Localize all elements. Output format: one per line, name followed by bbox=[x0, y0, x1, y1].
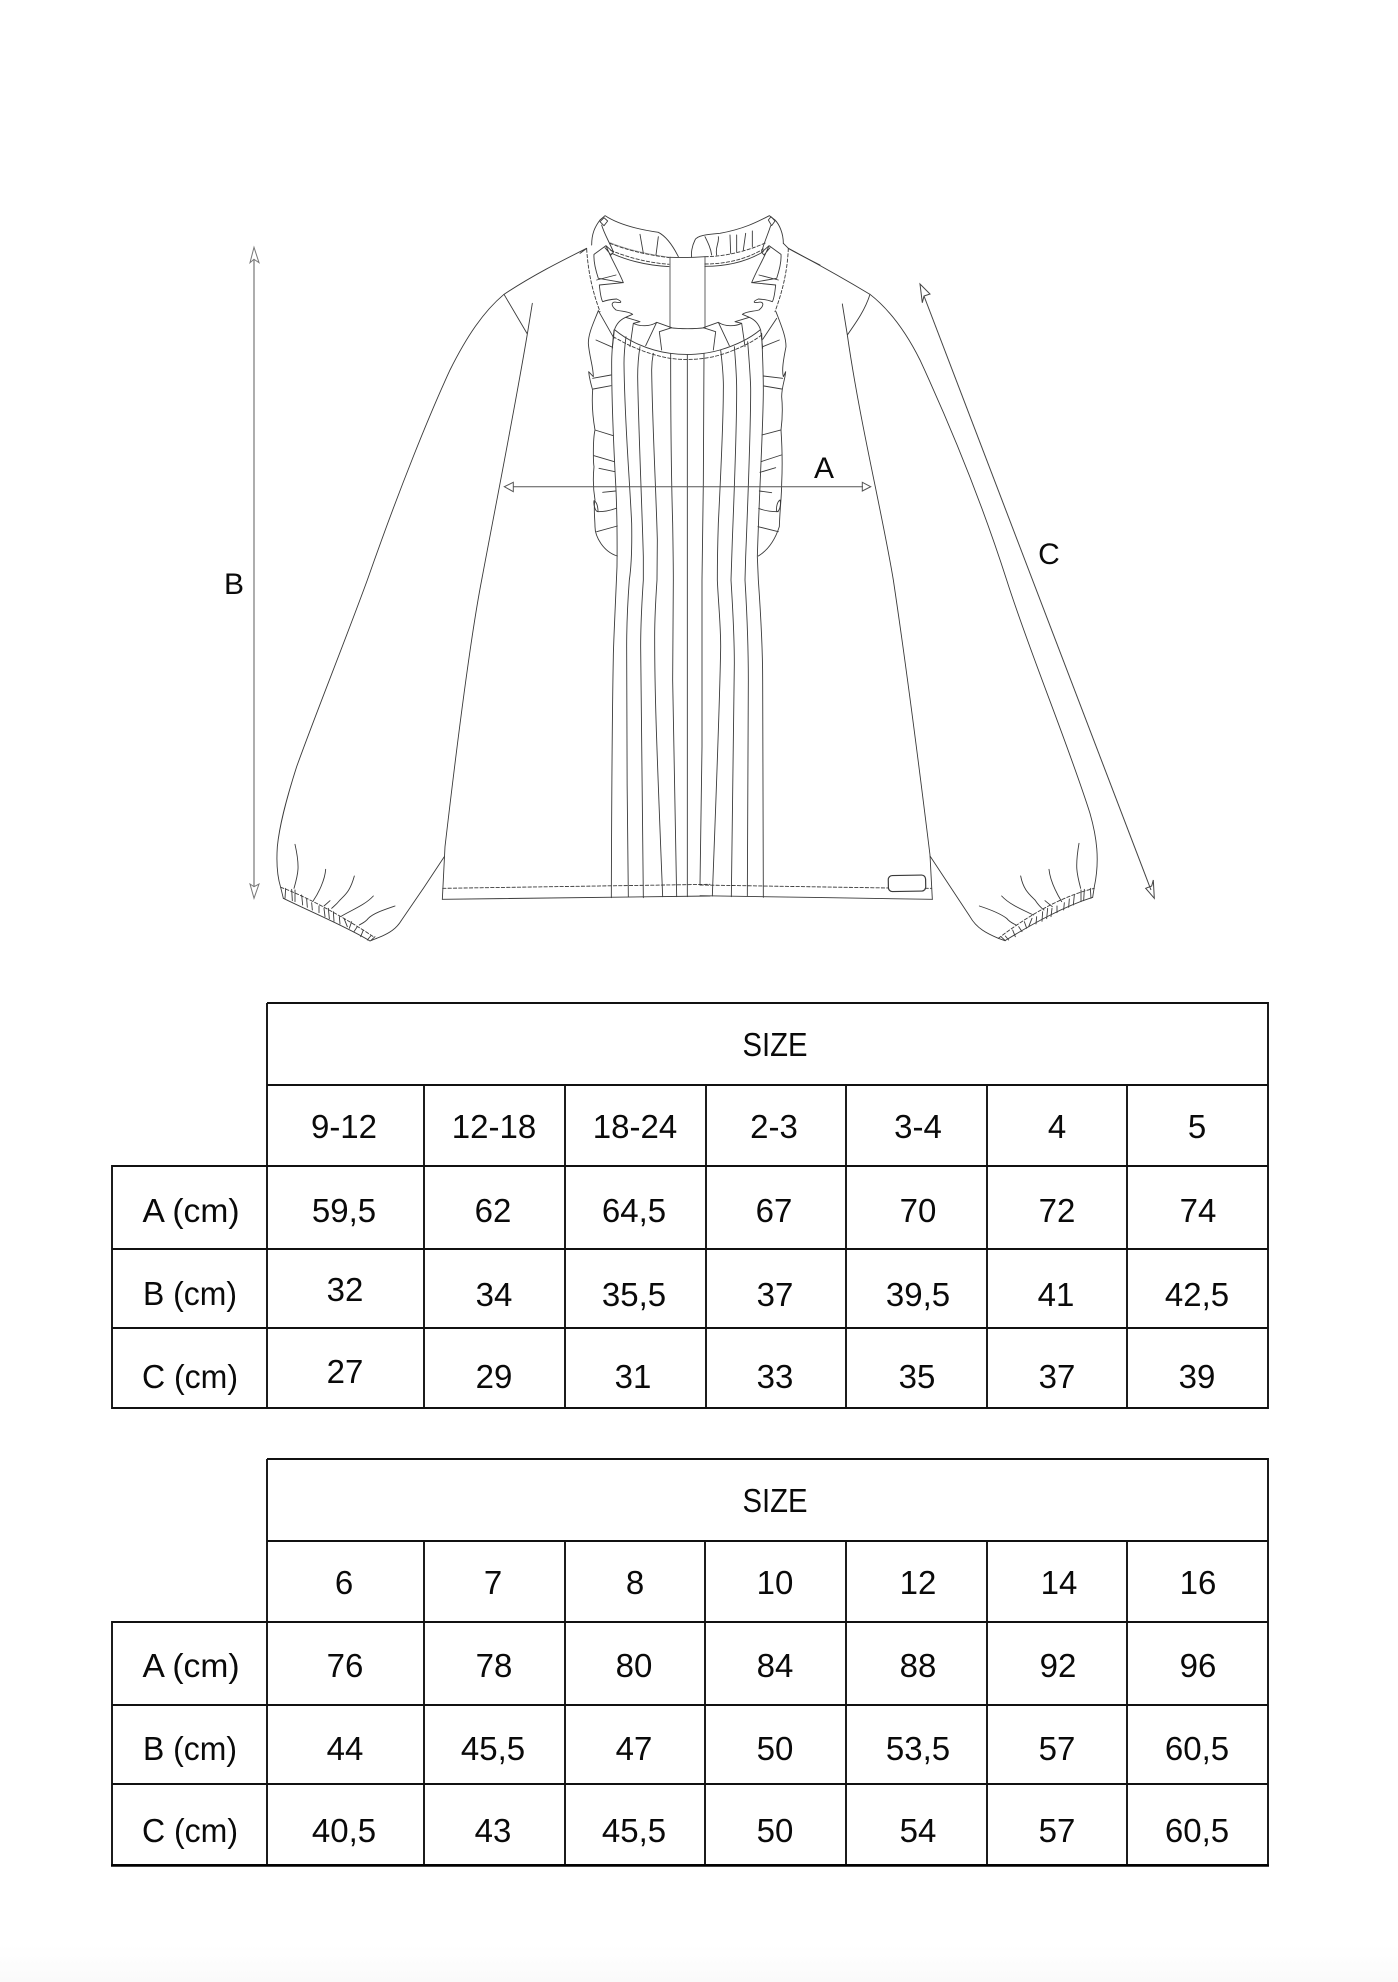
row: A (cm): 78 bbox=[476, 1647, 512, 1684]
table: sizes 6 to 16 years bbox=[111, 1459, 1269, 1866]
row: C (cm): 43 bbox=[475, 1812, 511, 1849]
row: A (cm): 72 bbox=[1039, 1192, 1075, 1229]
heading: SIZE: SIZE bbox=[742, 1026, 808, 1063]
table grid bbox=[112, 1459, 1268, 1865]
row: B (cm): 34 bbox=[476, 1276, 512, 1313]
row: B (cm): 47 bbox=[616, 1730, 652, 1767]
row: C (cm): 54 bbox=[900, 1812, 936, 1849]
header row: size names: 12 bbox=[900, 1564, 936, 1601]
row: C (cm): 33 bbox=[757, 1358, 793, 1395]
label: C: C bbox=[1038, 538, 1060, 571]
header row: size names: 6 bbox=[335, 1564, 353, 1601]
row: B (cm): 53,5 bbox=[886, 1730, 950, 1767]
header row: size names: 14 bbox=[1041, 1564, 1077, 1601]
row: B (cm): B (cm) bbox=[143, 1275, 237, 1312]
header row: size names: 8 bbox=[626, 1564, 644, 1601]
row: B (cm): 37 bbox=[757, 1276, 793, 1313]
garment: blouse technical flat sketch bbox=[277, 216, 1097, 941]
header row: size names: 12-18 bbox=[452, 1108, 536, 1145]
left cuff, underarm seam and hem bbox=[281, 844, 710, 941]
header row: size names: 2-3 bbox=[750, 1108, 798, 1145]
header row: size names bbox=[311, 1108, 1206, 1145]
row: A (cm): 84 bbox=[757, 1647, 793, 1684]
row: C (cm): 37 bbox=[1039, 1358, 1075, 1395]
row: B (cm): 50 bbox=[757, 1730, 793, 1767]
row: A (cm): 96 bbox=[1180, 1647, 1216, 1684]
row: C (cm): 27 bbox=[327, 1353, 363, 1390]
header row: size names: 3-4 bbox=[894, 1108, 942, 1145]
row: B (cm): 39,5 bbox=[886, 1276, 950, 1313]
row: A (cm): 74 bbox=[1180, 1192, 1216, 1229]
row: B (cm) bbox=[143, 1730, 1229, 1767]
row: B (cm): 42,5 bbox=[1165, 1276, 1229, 1313]
header row: size names: 5 bbox=[1188, 1108, 1206, 1145]
table grid bbox=[112, 1003, 1268, 1408]
row: A (cm): 70 bbox=[900, 1192, 936, 1229]
arrow: measurement C (sleeve length) bbox=[920, 284, 1154, 898]
row: C (cm): C (cm) bbox=[142, 1358, 238, 1395]
row: B (cm): 44 bbox=[327, 1730, 363, 1767]
row: A (cm): 88 bbox=[900, 1647, 936, 1684]
row: C (cm) bbox=[142, 1812, 1229, 1849]
row: C (cm): 60,5 bbox=[1165, 1812, 1229, 1849]
row: C (cm): 50 bbox=[757, 1812, 793, 1849]
header row: size names: 9-12 bbox=[311, 1108, 377, 1145]
header row: size names: 7 bbox=[484, 1564, 502, 1601]
row: A (cm) bbox=[142, 1647, 1216, 1684]
row: B (cm): 45,5 bbox=[461, 1730, 525, 1767]
header row: size names bbox=[335, 1564, 1216, 1601]
row: B (cm): 57 bbox=[1039, 1730, 1075, 1767]
row: B (cm): 35,5 bbox=[602, 1276, 666, 1313]
row: B (cm): 41 bbox=[1038, 1276, 1074, 1313]
right cuff, underarm seam, hem and label bbox=[700, 843, 1094, 941]
heading: SIZE: SIZE bbox=[742, 1482, 808, 1519]
row: C (cm): 29 bbox=[476, 1358, 512, 1395]
table: sizes 9-12 months to 5 years bbox=[112, 1003, 1268, 1408]
table bottom rule bbox=[111, 1864, 1269, 1867]
row: C (cm): 39 bbox=[1179, 1358, 1215, 1395]
row: A (cm): 67 bbox=[756, 1192, 792, 1229]
label: B: B bbox=[224, 568, 244, 601]
header row: size names: 10 bbox=[757, 1564, 793, 1601]
row: A (cm): 76 bbox=[327, 1647, 363, 1684]
left sleeve, left side ruffle and left pleats bbox=[277, 248, 704, 899]
row: C (cm): 35 bbox=[899, 1358, 935, 1395]
row: B (cm): B (cm) bbox=[143, 1730, 237, 1767]
row: A (cm): A (cm) bbox=[142, 1192, 240, 1229]
row: A (cm): 62 bbox=[475, 1192, 511, 1229]
header row: size names: 18-24 bbox=[593, 1108, 677, 1145]
right sleeve, right side ruffle and right pleats bbox=[712, 248, 1097, 899]
arrow: measurement B (body length) bbox=[250, 247, 259, 898]
row: B (cm): 32 bbox=[327, 1271, 363, 1308]
row: C (cm): C (cm) bbox=[142, 1812, 238, 1849]
row: A (cm) bbox=[142, 1192, 1216, 1229]
row: C (cm) bbox=[142, 1353, 1215, 1395]
row: A (cm): A (cm) bbox=[142, 1647, 240, 1684]
row: B (cm) bbox=[143, 1271, 1229, 1313]
header row: size names: 16 bbox=[1180, 1564, 1216, 1601]
row: C (cm): 31 bbox=[615, 1358, 651, 1395]
row: A (cm): 92 bbox=[1040, 1647, 1076, 1684]
row: A (cm): 80 bbox=[616, 1647, 652, 1684]
arrow: measurement A (chest width) bbox=[504, 482, 871, 492]
label: A: A bbox=[814, 452, 834, 485]
row: C (cm): 57 bbox=[1039, 1812, 1075, 1849]
row: C (cm): 40,5 bbox=[312, 1812, 376, 1849]
row: A (cm): 59,5 bbox=[312, 1192, 376, 1229]
header row: size names: 4 bbox=[1048, 1108, 1066, 1145]
row: A (cm): 64,5 bbox=[602, 1192, 666, 1229]
collar, placket and neck ruffles bbox=[580, 216, 820, 359]
row: B (cm): 60,5 bbox=[1165, 1730, 1229, 1767]
row: C (cm): 45,5 bbox=[602, 1812, 666, 1849]
